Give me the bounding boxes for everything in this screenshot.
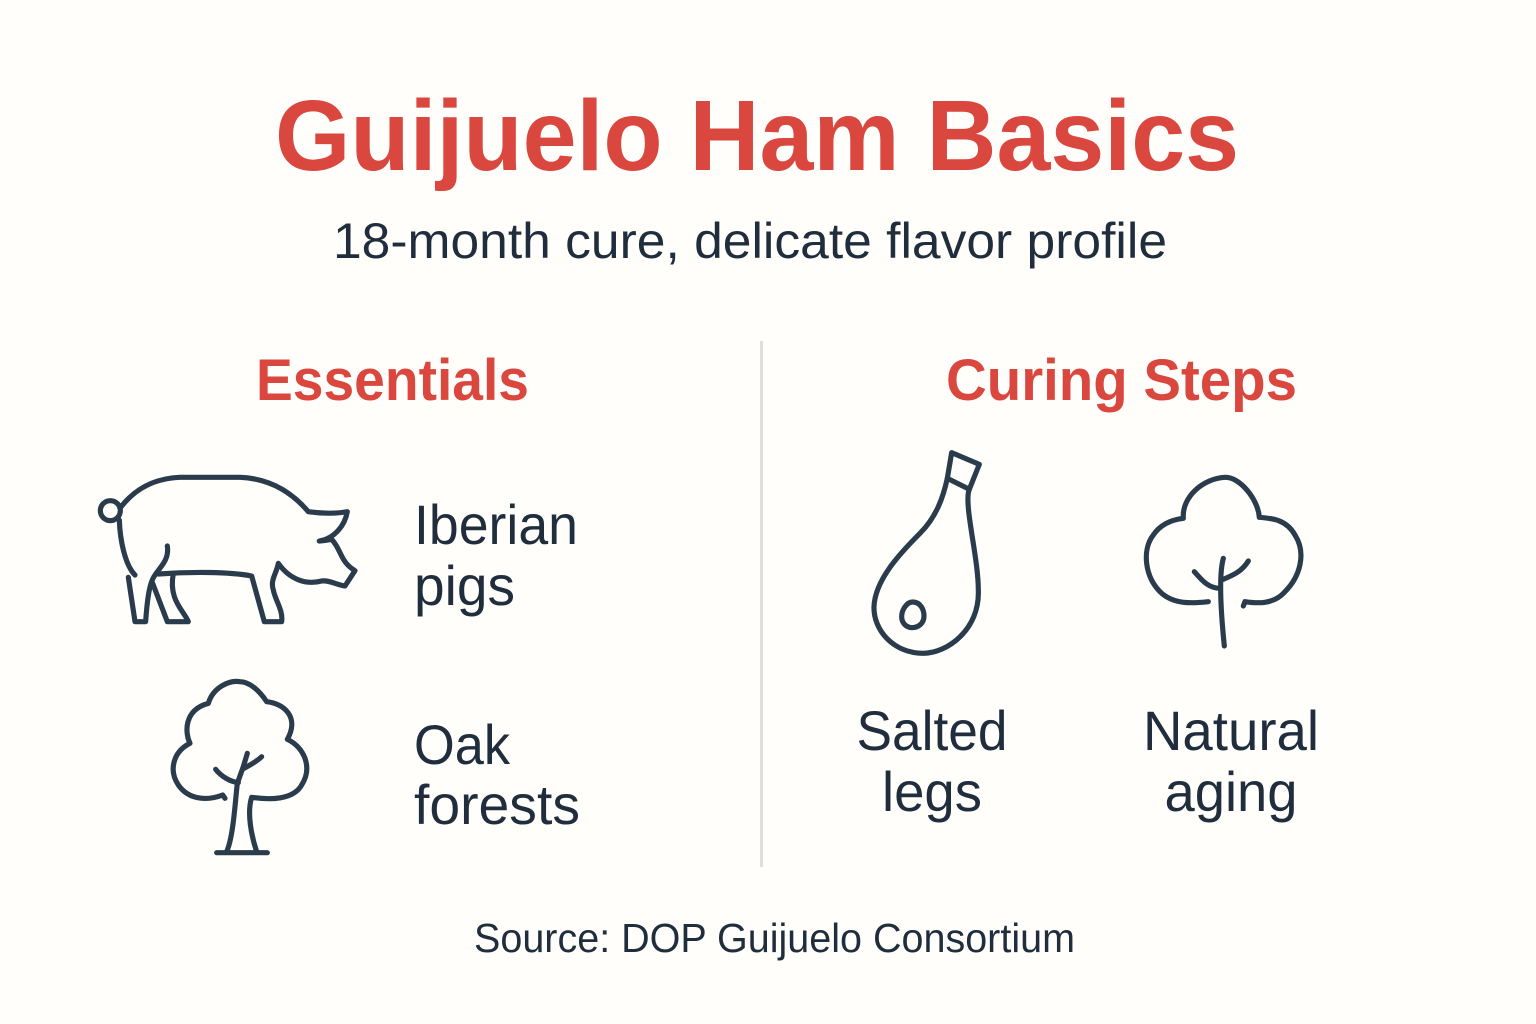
- label: oak forests: [414, 713, 580, 836]
- label: natural aging: aging: [1164, 760, 1298, 823]
- label: iberian pigs: [414, 493, 578, 617]
- icon: natural aging tree: [1146, 477, 1301, 646]
- label: oak forests: forests: [414, 773, 580, 836]
- label: iberian pigs: Iberian: [414, 493, 578, 556]
- icon: pig: [100, 477, 355, 622]
- icon: oak tree: [173, 681, 307, 853]
- source note: Source: DOP Guijuelo Consortium: [474, 915, 1075, 961]
- panel: essentials: [100, 348, 580, 853]
- label: natural aging: Natural: [1143, 699, 1319, 762]
- label: natural aging: [1143, 699, 1319, 823]
- label: salted legs: Salted: [856, 699, 1008, 762]
- panel: curing steps: [856, 348, 1319, 823]
- label: salted legs: legs: [882, 760, 982, 823]
- label: oak forests: Oak: [414, 713, 511, 776]
- heading: curing steps: Curing Steps: [946, 348, 1297, 413]
- label: iberian pigs: pigs: [414, 554, 515, 617]
- icon: ham leg: [874, 453, 979, 653]
- title: Guijuelo Ham Basics: [275, 80, 1239, 192]
- label: salted legs: [856, 699, 1008, 823]
- subtitle: 18-month cure, delicate flavor profile: [333, 213, 1167, 269]
- heading: essentials: Essentials: [256, 348, 529, 413]
